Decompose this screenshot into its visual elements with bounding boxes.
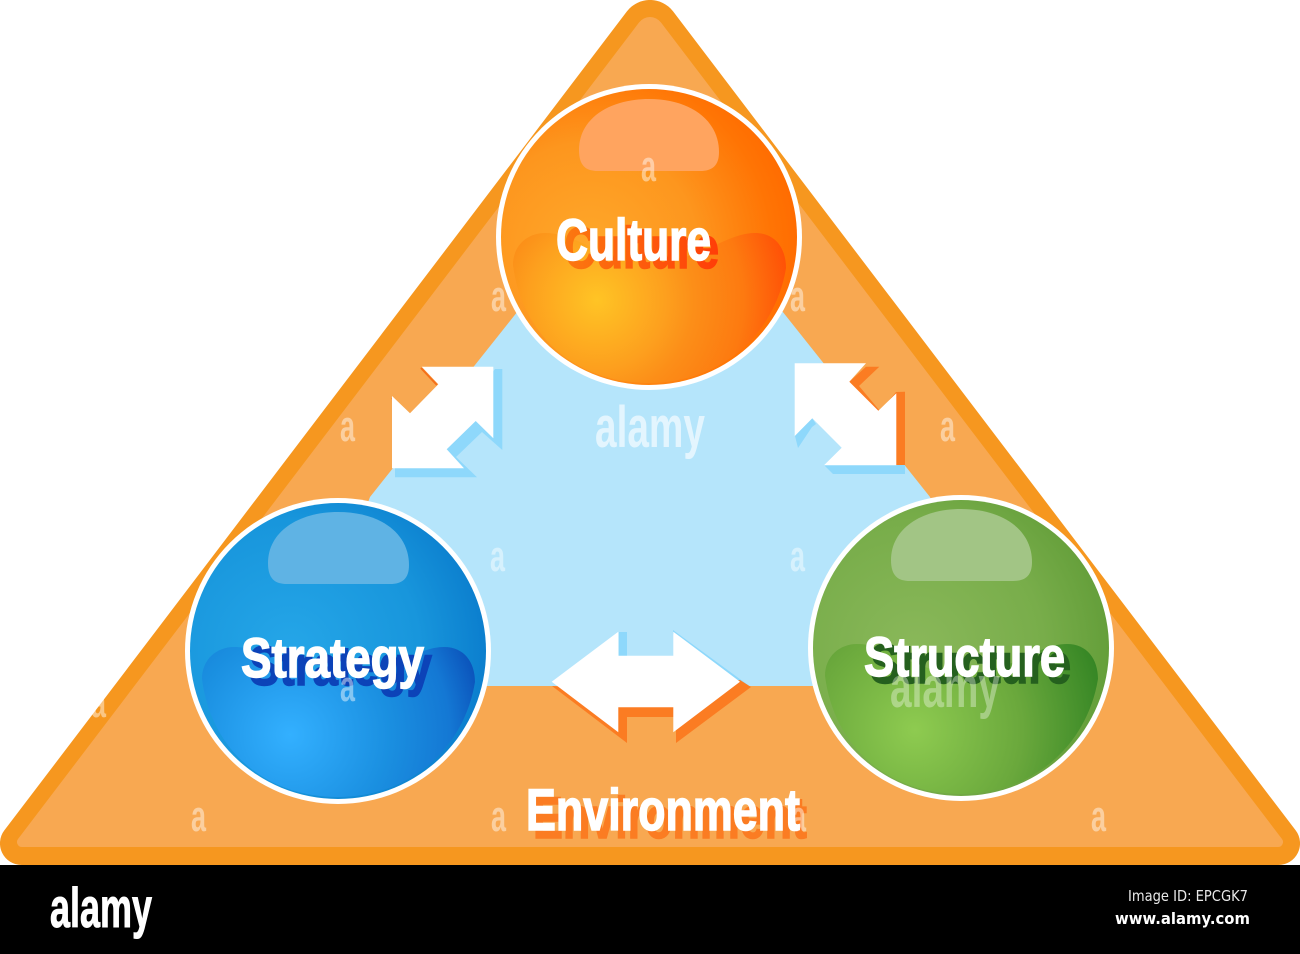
watermark marks: a [940, 402, 955, 451]
label: environment: Environment [526, 778, 800, 843]
watermark marks: alamy [595, 395, 705, 460]
inner light blue triangle [300, 145, 1000, 686]
culture lower glow [513, 233, 786, 383]
website: www.alamy.com [1115, 909, 1250, 928]
watermark marks [91, 142, 1106, 841]
watermark marks: a [340, 402, 355, 451]
watermark marks: a [340, 662, 355, 711]
arrow: strategy to culture [392, 367, 502, 477]
watermark marks: a [641, 142, 656, 191]
watermark marks: a [91, 678, 106, 727]
watermark marks: a [790, 532, 805, 581]
strategy label: Strategy [241, 626, 424, 689]
watermark marks: a [1091, 792, 1106, 841]
circle: strategy [185, 498, 491, 804]
circle: culture [496, 84, 802, 390]
watermark marks: a [491, 272, 506, 321]
label: environment: Environment [533, 786, 807, 851]
footer logo: alamy [50, 876, 152, 939]
watermark marks: alamy [890, 655, 1000, 720]
strategy highlight [268, 512, 409, 584]
culture label: Culture [556, 208, 711, 273]
footer bar [0, 865, 1300, 954]
arrow: strategy to structure [552, 630, 751, 743]
structure label: Structure [870, 632, 1071, 695]
watermark marks: a [191, 792, 206, 841]
watermark marks: a [491, 792, 506, 841]
watermark marks: a [791, 792, 806, 841]
watermark marks: a [490, 532, 505, 581]
circle: structure [808, 495, 1114, 801]
structure lower glow [825, 644, 1098, 794]
culture highlight [579, 99, 719, 171]
arrow: culture to structure [795, 363, 905, 474]
culture label: Culture [564, 216, 719, 281]
watermark marks: a [790, 272, 805, 321]
structure label: Structure [864, 625, 1065, 688]
strategy lower glow [202, 647, 475, 797]
strategy label: Strategy [249, 634, 432, 697]
structure highlight [891, 509, 1032, 581]
image id: Image ID: EPCGK7 [1128, 887, 1248, 905]
